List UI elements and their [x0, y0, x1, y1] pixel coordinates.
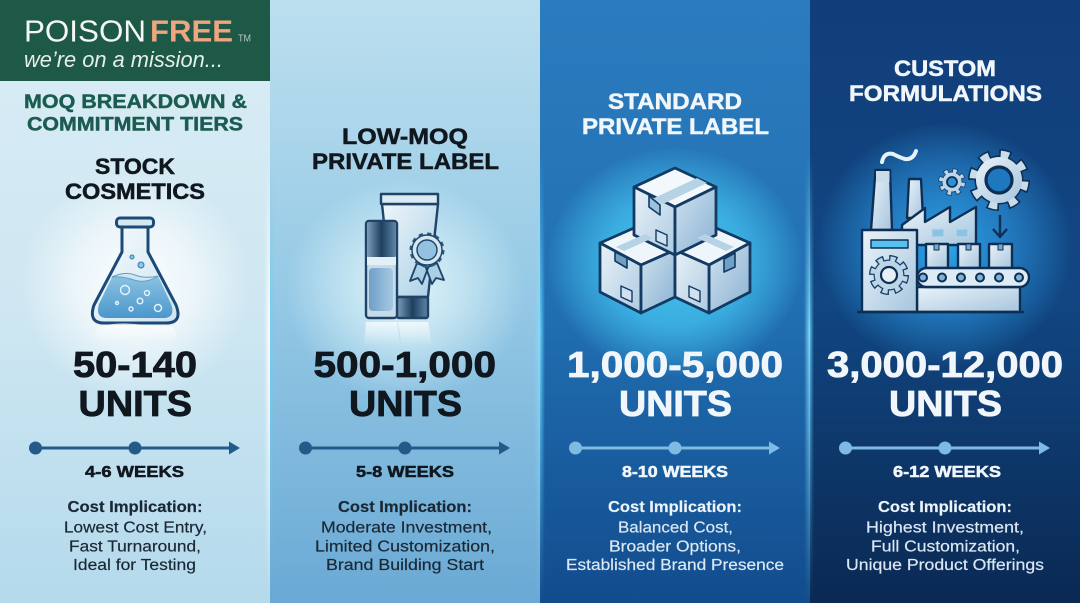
- cost implication text: Cost Implication:: [68, 499, 202, 516]
- figure: 50-140 units: [73, 344, 197, 424]
- cost implication text: Established Brand Presence: [566, 557, 784, 574]
- heading: custom formulations: CUSTOM: [894, 56, 996, 81]
- heading: standard private label: PRIVATE LABEL: [582, 114, 769, 139]
- cost implication text: Lowest Cost Entry,: [64, 520, 207, 536]
- timeline arrow: [29, 442, 240, 454]
- cost implication text: Brand Building Start: [326, 557, 485, 574]
- lead time: 5-8 WEEKS: [356, 464, 454, 481]
- cost implication text: Cost Implication:: [608, 499, 742, 516]
- icon: factory with conveyor and gears: [857, 151, 1029, 312]
- figure: 1,000-5,000 units: [567, 344, 783, 424]
- figure: 1,000-5,000 units: UNITS: [619, 383, 732, 424]
- cost implication text: Fast Turnaround,: [69, 538, 201, 556]
- column background: [540, 0, 810, 603]
- figure: 50-140 units: UNITS: [78, 383, 192, 424]
- cost implication text: Broader Options,: [609, 538, 741, 556]
- logo banner: TM: [238, 34, 251, 44]
- heading: standard private label: STANDARD: [608, 89, 742, 114]
- figure: 1,000-5,000 units: 1,000-5,000: [567, 344, 783, 385]
- cost implication text: Moderate Investment,: [321, 520, 492, 536]
- icon glow: [547, 147, 803, 377]
- timeline arrow: [569, 442, 780, 454]
- cost implication text: Cost Implication:: [338, 499, 472, 516]
- page title: MOQ BREAKDOWN &: [24, 91, 247, 113]
- column background: [270, 0, 540, 603]
- figure: 3,000-12,000 units: [827, 344, 1063, 424]
- cost implication text: Unique Product Offerings: [846, 557, 1044, 574]
- heading: low-MOQ private label: PRIVATE LABEL: [312, 149, 499, 174]
- cost implication text: Ideal for Testing: [73, 557, 196, 574]
- heading: custom formulations: FORMULATIONS: [849, 81, 1042, 106]
- column background: [0, 0, 270, 603]
- page title: [24, 91, 247, 136]
- panel: stock cosmetics: [0, 0, 270, 603]
- heading: stock cosmetics: COSMETICS: [65, 179, 205, 204]
- timeline arrow: [839, 442, 1050, 454]
- figure: 3,000-12,000 units: UNITS: [889, 383, 1002, 424]
- cost implication text: Limited Customization,: [315, 538, 495, 556]
- timeline arrow: [299, 442, 510, 454]
- icon glow: [20, 170, 250, 400]
- cost implication text: Balanced Cost,: [618, 520, 733, 536]
- panel: low-MOQ private label: [270, 0, 540, 603]
- heading: stock cosmetics: STOCK: [95, 154, 175, 179]
- page title: COMMITMENT TIERS: [27, 114, 243, 136]
- panel: custom formulations: [810, 0, 1080, 603]
- figure: 3,000-12,000 units: 3,000-12,000: [827, 344, 1063, 385]
- heading: custom formulations: [849, 56, 1042, 106]
- icon glow: [285, 178, 525, 402]
- cost implication text: Cost Implication:: [878, 499, 1012, 516]
- heading: standard private label: [582, 89, 769, 139]
- column background: [810, 0, 1080, 603]
- icon: stacked boxes: [600, 168, 750, 313]
- heading: low-MOQ private label: LOW-MOQ: [342, 124, 468, 149]
- icon: flask: [92, 218, 178, 341]
- logo banner: [0, 0, 270, 81]
- cost implication text: Full Customization,: [871, 538, 1020, 556]
- cost implication text: [566, 499, 784, 574]
- icon glow: [817, 123, 1073, 367]
- cost implication text: Highest Investment,: [866, 520, 1024, 536]
- figure: 50-140 units: 50-140: [73, 344, 197, 385]
- lead time: 6-12 WEEKS: [893, 464, 1001, 481]
- cost implication text: [315, 499, 495, 574]
- icon: bottle, tube and ribbon: [364, 194, 444, 346]
- cost implication text: [846, 499, 1044, 574]
- figure: 500-1,000 units: UNITS: [349, 383, 462, 424]
- heading: low-MOQ private label: [312, 124, 499, 174]
- logo banner: we’re on a mission...: [24, 47, 223, 72]
- logo banner: POISON: [24, 14, 146, 48]
- panel: standard private label: [540, 0, 810, 603]
- lead time: 8-10 WEEKS: [622, 464, 728, 481]
- heading: stock cosmetics: [65, 154, 205, 204]
- figure: 500-1,000 units: 500-1,000: [314, 344, 496, 385]
- logo banner: FREE: [150, 14, 233, 48]
- lead time: 4-6 WEEKS: [85, 464, 184, 481]
- figure: 500-1,000 units: [314, 344, 496, 424]
- cost implication text: [64, 499, 207, 574]
